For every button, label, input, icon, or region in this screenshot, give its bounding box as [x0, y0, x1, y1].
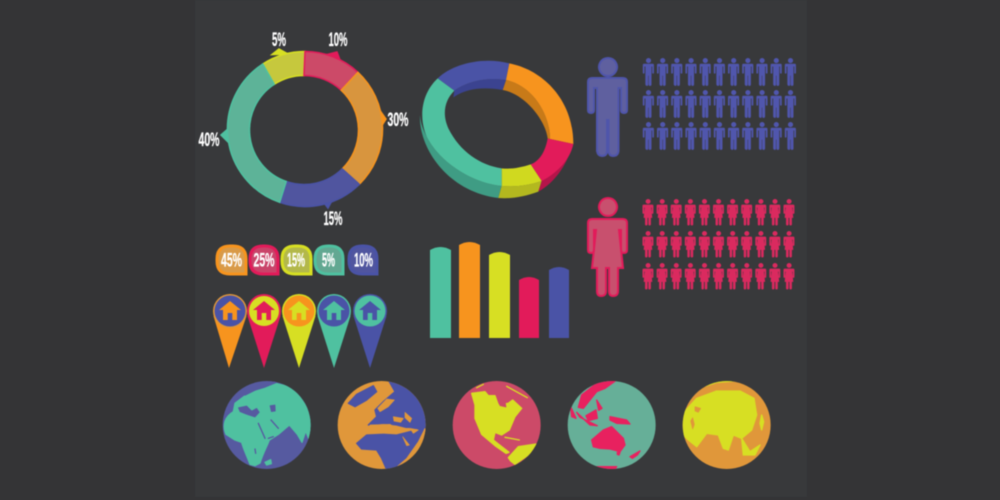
label 5%: 5% — [272, 30, 286, 51]
tag 25% — [250, 246, 278, 274]
background panel — [195, 0, 807, 497]
label 30%: 30% — [388, 110, 409, 131]
ring: yellow segment — [502, 164, 542, 186]
ring: orange segment — [506, 63, 573, 144]
tag 10%: 10% — [354, 250, 373, 272]
ring: red segment — [531, 138, 573, 181]
tag 5% — [315, 246, 343, 274]
globes row — [223, 380, 771, 472]
bar: red — [519, 277, 539, 338]
segment: blue 15% — [280, 169, 359, 208]
globe: Europe, blue on orange — [338, 380, 427, 470]
donut chart with percentages — [198, 30, 409, 230]
side walls — [420, 79, 573, 198]
pin: red — [247, 294, 281, 368]
tag 5%: 5% — [322, 250, 335, 272]
3D donut chart — [420, 61, 573, 198]
ring: blue segment — [438, 61, 509, 91]
label 15%: 15% — [324, 209, 343, 230]
tag 45% — [217, 246, 246, 274]
pin: blue — [353, 294, 387, 368]
pin: green — [317, 294, 351, 368]
pin: orange — [213, 294, 247, 368]
location pins — [213, 294, 387, 368]
globe: Americas, yellow on red — [453, 381, 541, 469]
globe: Asia, yellow on orange — [680, 381, 771, 469]
label 10%: 10% — [328, 30, 348, 51]
large female figure — [588, 198, 627, 296]
segment: red 10% — [304, 51, 358, 90]
percentage tags — [217, 246, 377, 274]
globe: Africa, green on blue — [223, 381, 312, 469]
large male figure — [588, 58, 627, 156]
globe: Oceania, red on teal — [568, 380, 656, 472]
bar: yellow — [489, 252, 510, 338]
bar: blue — [549, 267, 569, 338]
tag 10% — [349, 246, 377, 274]
bar: green — [430, 247, 451, 338]
tag 45%: 45% — [221, 250, 242, 272]
tag 15%: 15% — [287, 250, 305, 272]
label 40%: 40% — [198, 130, 220, 151]
ring: green segment — [422, 78, 502, 186]
bar: orange — [459, 242, 480, 338]
bar chart — [430, 242, 569, 338]
pin: yellow — [282, 294, 316, 368]
male pictogram grid — [643, 58, 796, 150]
segment: orange 30% — [341, 72, 386, 184]
female pictogram grid — [642, 199, 794, 289]
tag 15% — [282, 246, 311, 274]
segment: yellow 5% — [263, 49, 305, 84]
segment: green 40% — [221, 64, 286, 202]
tag 25%: 25% — [254, 250, 275, 272]
